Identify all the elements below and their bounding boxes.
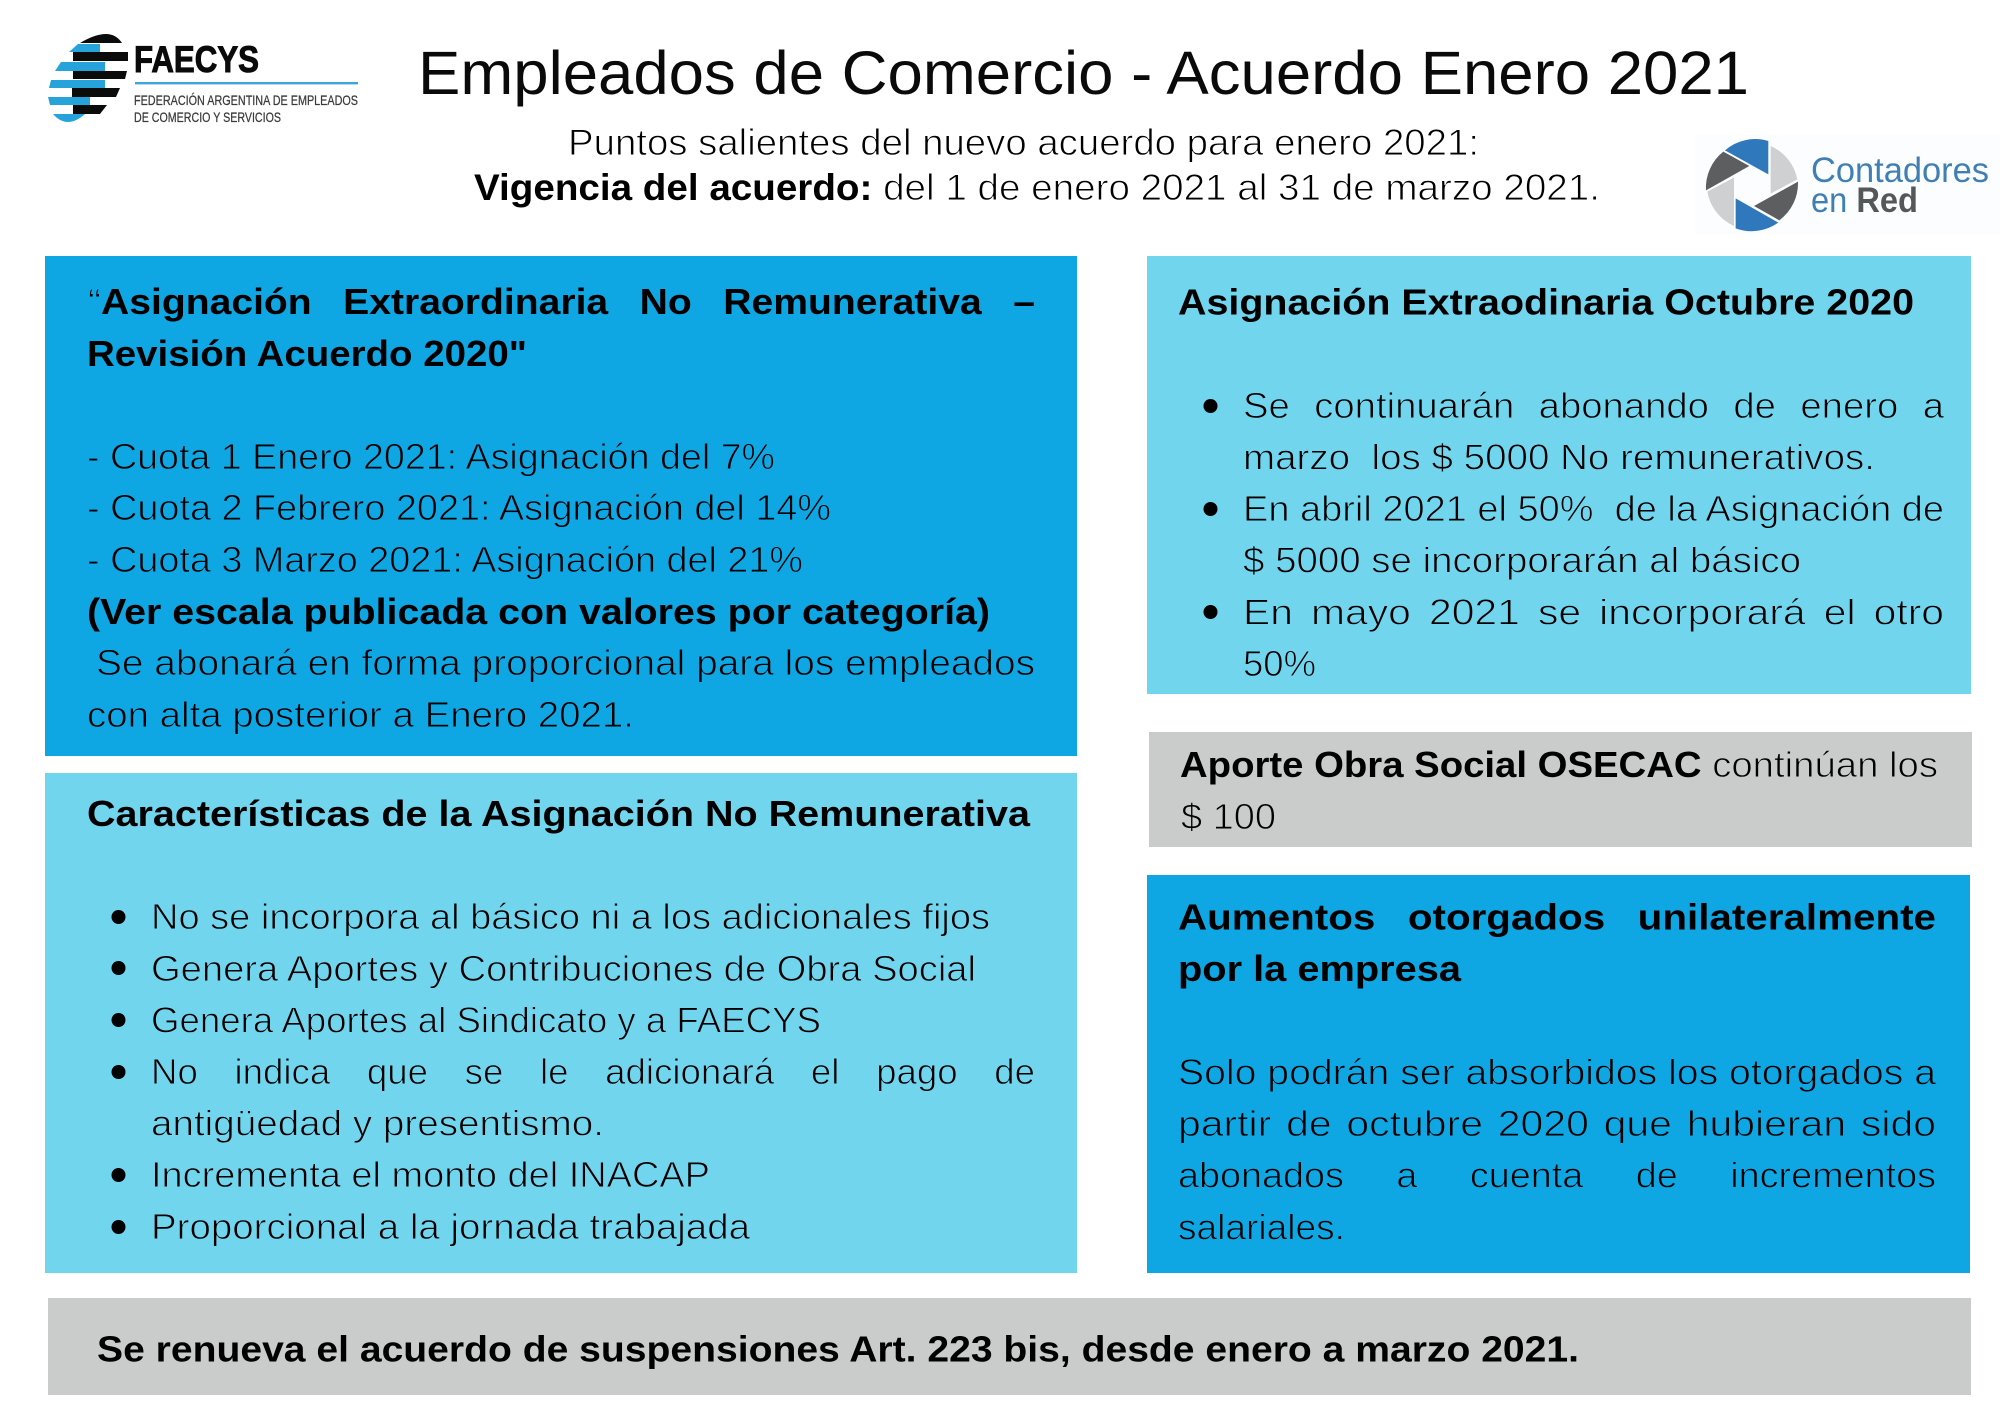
cuotas: [87, 436, 831, 580]
subtitle: Vigencia del acuerdo: del 1 de enero 2021 al 31 de marzo 2021.: [474, 167, 1600, 208]
heading: Características de la Asignación No Remunerativa: [87, 793, 1031, 834]
icon: camera shutter: [1706, 139, 1798, 231]
FAECYS wordmark: FAECYS: [134, 39, 259, 80]
panel: Aporte Obra Social: [1149, 732, 1972, 847]
cuotas: - Cuota 2 Febrero 2021: Asignación del 14%: [87, 487, 831, 528]
body text: [1178, 1052, 1937, 1248]
logo: Contadores en Red: en Red: [1811, 181, 1918, 220]
bullet list: [1204, 385, 1945, 684]
aporte text: $ 100: [1181, 796, 1276, 837]
body text: Solo podrán ser absorbidos los otorgados a: [1178, 1052, 1937, 1092]
heading: “Asignación Extraordinaria No Remunerativa –: [88, 281, 1035, 322]
logo: Contadores en Red: [1695, 135, 2000, 235]
panel: Características: [45, 773, 1077, 1273]
bullet list: En abril 2021 el 50% de la Asignación de: [1243, 488, 1944, 529]
body text: salariales.: [1178, 1206, 1345, 1248]
proportional note: Se abonará en forma proporcional para los empleados: [96, 642, 1035, 683]
bullet list: marzo los $ 5000 No remunerativos.: [1243, 436, 1875, 478]
title: Empleados de Comercio - Acuerdo Enero 2021: [418, 39, 1749, 107]
aporte text: Aporte Obra Social OSECAC continúan los: [1180, 744, 1938, 785]
panel: Asignación Extraordinaria: [45, 256, 1077, 756]
Contadores en Red wordmark: Contadores: [1811, 151, 1989, 190]
heading: por la empresa: [1178, 948, 1462, 989]
bullet list: Genera Aportes al Sindicato y a FAECYS: [151, 1000, 821, 1040]
logo: FAECYS: [48, 34, 358, 125]
bullet list: Proporcional a la jornada trabajada: [151, 1206, 751, 1247]
subtitle: Puntos salientes del nuevo acuerdo para enero 2021:: [568, 122, 1479, 163]
panel: Aumentos otorgados: [1147, 875, 1970, 1273]
cuotas: - Cuota 3 Marzo 2021: Asignación del 21%: [87, 539, 803, 580]
bullet list: Incrementa el monto del INACAP: [151, 1154, 710, 1195]
bullet list: Se continuarán abonando de enero a: [1243, 385, 1945, 426]
footer text: Se renueva el acuerdo de suspensiones Art. 223 bis, desde enero a marzo 2021.: [97, 1328, 1579, 1370]
aporte text: [1180, 744, 1938, 837]
note: ver escala: (Ver escala publicada con valores por categoría): [87, 591, 990, 632]
FAECYS full name: FEDERACIÓN ARGENTINA DE EMPLEADOS: [134, 92, 358, 108]
panel: Asignación Octubre 2020: [1147, 256, 1971, 694]
body text: partir de octubre 2020 que hubieran sido: [1178, 1103, 1936, 1144]
proportional note: [87, 642, 1035, 735]
bullet list: No indica que se le adicionará el pago de: [151, 1051, 1035, 1092]
bullet list: En mayo 2021 se incorporará el otro: [1243, 592, 1944, 632]
bullet list: 50%: [1243, 643, 1316, 684]
bullet list: [112, 896, 1035, 1247]
body text: abonados a cuenta de incrementos: [1178, 1154, 1936, 1196]
bullet list: No se incorpora al básico ni a los adicionales fijos: [151, 896, 990, 937]
heading: [1178, 896, 1936, 989]
heading: [87, 281, 1035, 374]
heading: Aumentos otorgados unilateralmente: [1178, 896, 1936, 938]
panel: suspensiones footer: [48, 1298, 1971, 1395]
subtitle: [474, 122, 1600, 208]
bullet list: Genera Aportes y Contribuciones de Obra Social: [151, 948, 976, 989]
cuotas: - Cuota 1 Enero 2021: Asignación del 7%: [87, 436, 775, 477]
bullet list: antigüedad y presentismo.: [151, 1102, 604, 1144]
heading: Revisión Acuerdo 2020": [87, 333, 527, 374]
icon: striped globe: [48, 34, 128, 122]
heading: Asignación Extraodinaria Octubre 2020: [1178, 282, 1914, 322]
proportional note: con alta posterior a Enero 2021.: [87, 694, 634, 735]
bullet list: $ 5000 se incorporarán al básico: [1243, 540, 1801, 580]
logo: FAECYS: DE COMERCIO Y SERVICIOS: [134, 109, 281, 125]
